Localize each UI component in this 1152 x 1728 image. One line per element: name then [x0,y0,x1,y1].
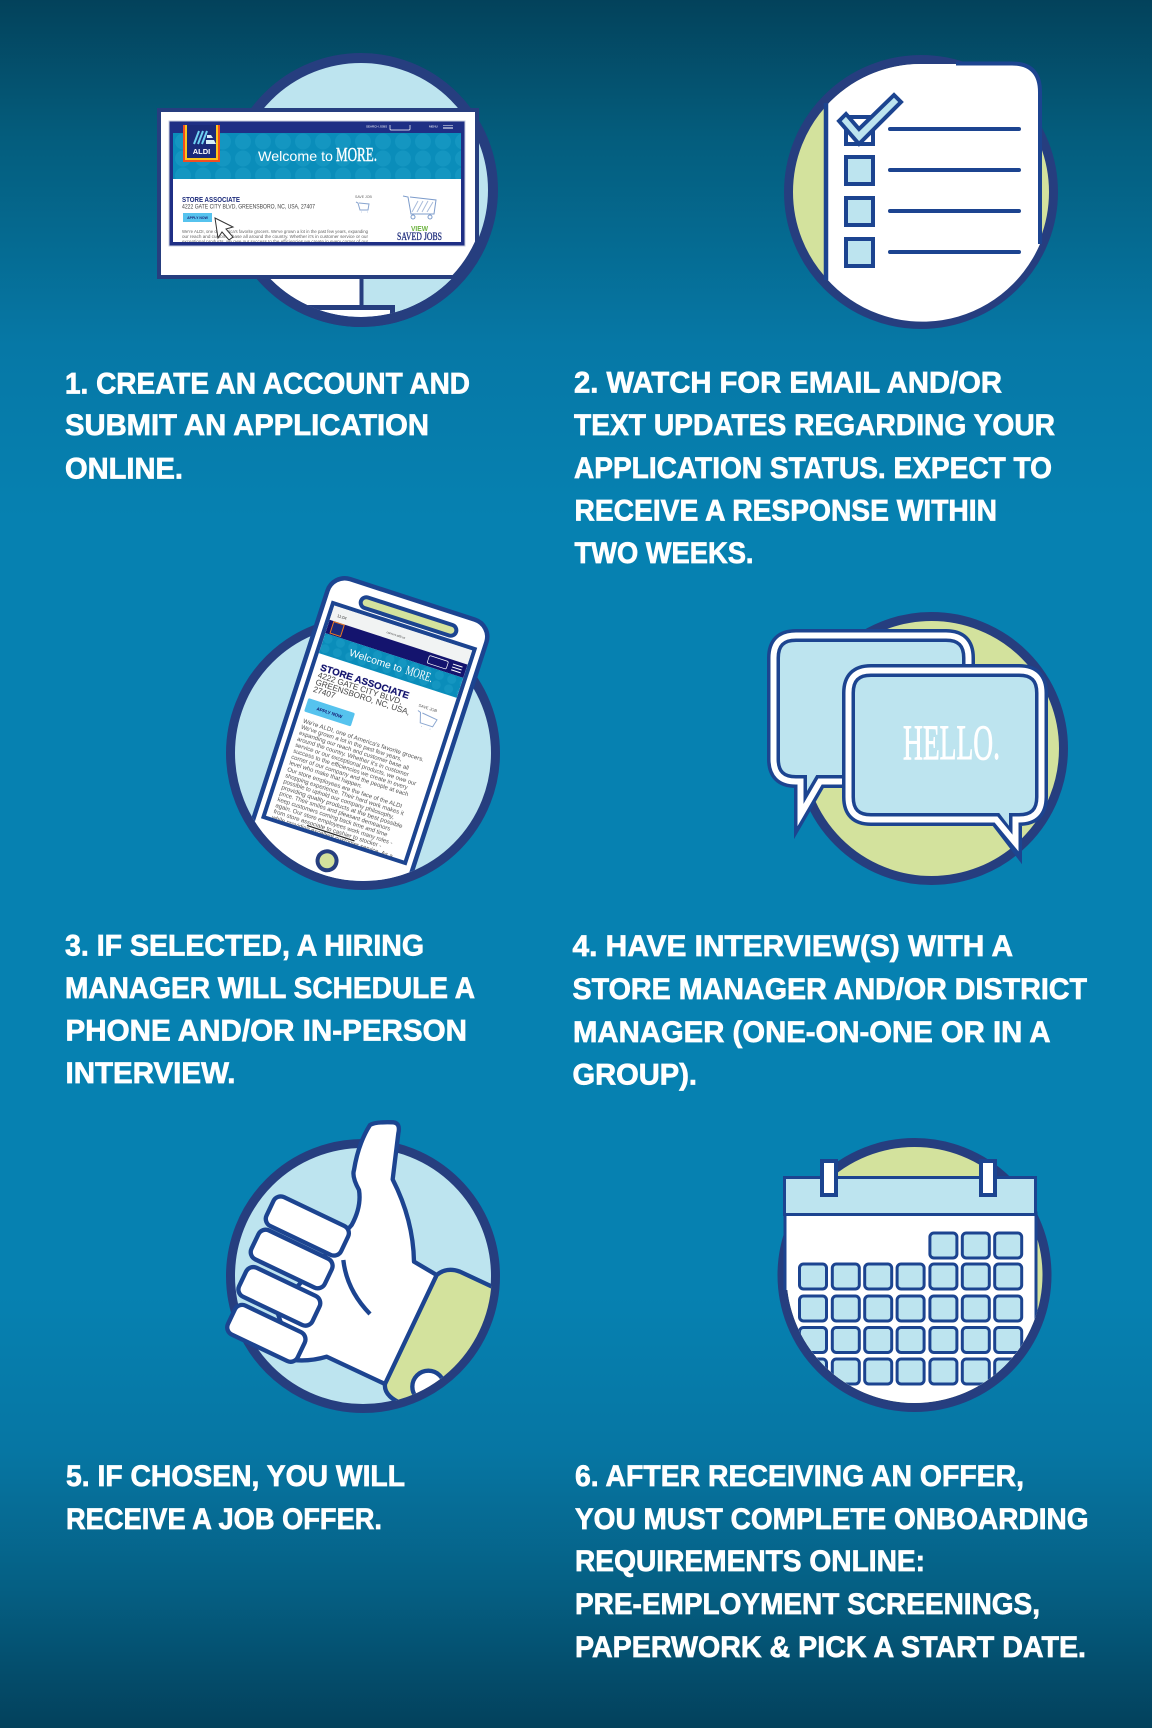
panel: step 2 [574,60,1055,570]
icon: desktop monitor showing job page: our reach and customer base all around the country. Whether it's in customer service or our [182,234,368,240]
icon: smartphone showing job page: Welcome to [348,648,404,675]
icon: thumbs up [225,1120,500,1413]
step 1 text: 1. CREATE AN ACCOUNT AND [65,368,470,400]
panel: step 6 [575,1142,1088,1664]
cuff button [410,1368,444,1395]
icon: smartphone showing job page: keep customers coming back time and time [276,797,389,839]
icon: smartphone showing job page: expanding our reach and customer base all [298,731,409,772]
front bubble [848,670,1042,845]
icon: smartphone showing job page: price. Their smiles and pleasant demeanors [278,791,391,833]
icon: smartphone showing job page: level who make that happen. [288,761,363,790]
icon: desktop monitor showing job page: 4222 GATE CITY BLVD, GREENSBORO, NC, USA, 27407 [182,204,315,210]
icon: desktop monitor showing job page: SAVE JOB [355,195,373,199]
icon: smartphone showing job page: while providing excellent customer service. As a [270,815,394,860]
icon: smartphone showing job page: success to the efficiencies we create in every [292,749,408,791]
step 4 text: GROUP). [572,1058,697,1092]
icon: smartphone showing job page: again. Our store employees work many roles - [275,803,393,847]
step 2 text: RECEIVE A RESPONSE WITHIN [574,494,997,528]
icon: desktop monitor showing job page: exceptional products, we owe our success to the efficiencies we create in every corner of our [182,239,368,245]
icon: smartphone showing job page: MORE. [404,662,435,685]
panel: step 5 [66,1122,510,1536]
home button [315,849,339,873]
icon: large cart [403,196,436,219]
step 6 text: PRE-EMPLOYMENT SCREENINGS, [575,1588,1040,1621]
icon: smartphone showing job page: We're ALDI, one of America's favorite grocers. [302,719,425,764]
icon: smartphone showing job page: service or our exceptional products, we owe our [294,743,417,788]
icon: smartphone showing job page: 11:04 [337,613,348,621]
step 3 text: MANAGER WILL SCHEDULE A [65,972,475,1005]
palm crease [343,1260,370,1314]
icon: smartphone showing job page: 4222 GATE CITY BLVD, [317,671,403,706]
icon: smartphone showing job page: from store associate to cashier to stocker - [273,809,382,850]
icon: smartphone showing job page: providing quality products at the best possible [280,785,404,830]
panel: step 4 [572,616,1087,1092]
banner headline: Welcome to [258,148,333,164]
step 4 text: MANAGER (ONE-ON-ONE OR IN A [573,1016,1050,1049]
back bubble [774,636,968,815]
icon: smartphone showing job page: We've grown a lot in the past few years, [300,725,403,763]
icon: smartphone showing job page: SAVE JOB [418,703,438,713]
icon: smartphone showing job page: 27407 [312,685,337,701]
calendar day grid [800,1233,1022,1384]
icon: smartphone showing job page: GREENSBORO, NC, USA, [314,678,411,717]
step 2 text: TEXT UPDATES REGARDING YOUR [574,409,1055,442]
step 6 text [575,1460,1088,1664]
speaker [359,596,458,637]
icon: checklist [788,60,1054,324]
icon: smartphone showing job page: possible to uphold our company philosophy, [282,779,395,821]
icon: calendar [782,1142,1047,1423]
apply button: APPLY NOW [187,216,209,220]
bubble text: HELLO. [903,714,1000,770]
calendar rings [822,1161,995,1195]
step 2 text: 2. WATCH FOR EMAIL AND/OR [574,366,1002,400]
sleeve cuff [382,1268,492,1401]
step 2 text: TWO WEEKS. [574,537,754,570]
ALDI logo: ALDI [193,147,210,156]
step 3 text: 3. IF SELECTED, A HIRING [65,930,424,962]
icon: desktop monitor showing job page: We're ALDI, one of America's favorite grocers. We've grown a lot in the past few years, expanding [182,229,368,235]
step 5 text: 5. IF CHOSEN, YOU WILL [66,1460,405,1493]
step 1 text: ONLINE. [65,452,183,486]
fingers [225,1194,352,1364]
step 5 text [66,1460,405,1536]
icon: desktop monitor showing job page: VIEW [411,226,428,233]
hand [277,1122,437,1384]
icon: speech bubbles [774,616,1064,880]
panel: step 1 [65,58,493,486]
step 4 text: STORE MANAGER AND/OR DISTRICT [572,973,1087,1006]
icon: smartphone showing job page: Our store employees are the face of the ALDI [286,767,403,810]
step 2 text: APPLICATION STATUS. EXPECT TO [574,452,1052,485]
icon: desktop monitor showing job page: STORE ASSOCIATE [182,195,240,204]
icon: desktop monitor showing job page: SAVED JOBS [397,229,442,243]
icon: desktop monitor showing job page [159,58,493,325]
icon: desktop monitor showing job page: SEARCH JOBS [366,124,387,128]
banner headline: MORE. [336,144,377,166]
step 3 text: INTERVIEW. [66,1057,236,1090]
icon: mouse cursor [215,218,233,240]
icon: smartphone showing job page: APPLY NOW [316,706,344,720]
icon: smartphone showing job page: STORE ASSOCIATE [319,663,411,702]
apply button [183,213,212,222]
step 6 text: YOU MUST COMPLETE ONBOARDING [575,1503,1088,1536]
icon: smartphone showing job page [226,576,500,890]
step 1 text [65,368,470,486]
icon: desktop monitor showing job page: MENU [429,124,438,128]
step 3 text: PHONE AND/OR IN-PERSON [66,1014,467,1048]
icon: smartphone showing job page: shopping experience. Their hard work makes it [284,773,405,817]
step 4 text [572,930,1087,1092]
banner headline [258,148,376,162]
icon: smartphone showing job page: corner of our company and the people at each [290,755,409,798]
step 1 text: SUBMIT AN APPLICATION [65,409,429,442]
step 3 text [65,930,475,1090]
icon: check mark [839,95,901,144]
step 6 text: PAPERWORK & PICK A START DATE. [575,1631,1086,1664]
step 4 text: 4. HAVE INTERVIEW(S) WITH A [572,930,1013,963]
icon: small cart [356,202,369,212]
step 2 text [574,366,1055,570]
step 5 text: RECEIVE A JOB OFFER. [66,1503,382,1536]
ALDI logo [183,125,220,162]
step 6 text: REQUIREMENTS ONLINE: [575,1545,925,1578]
icon: smartphone showing job page: careers.aldi.us [386,630,406,640]
panel: step 3 [65,574,496,1090]
step 6 text: 6. AFTER RECEIVING AN OFFER, [575,1460,1024,1493]
icon: smartphone showing job page: around the country. Whether it's in customer [296,737,409,779]
